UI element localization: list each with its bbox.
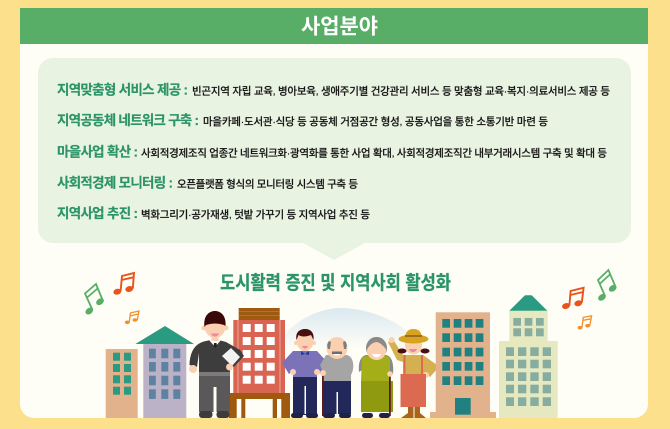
building: cream tower with teal roof xyxy=(499,295,558,418)
text: item 4 xyxy=(57,176,358,190)
icon: green music note left xyxy=(84,284,105,316)
building: tan left xyxy=(106,349,138,418)
person: bald elderly man with cane xyxy=(320,337,353,418)
building: tan right xyxy=(430,312,496,418)
icon: small orange music note right xyxy=(578,316,592,330)
text: item 3 xyxy=(57,144,607,160)
text: item 2: 마을카페·도서관·식당 등 공동체 거점공간 형성, 공동사업을 통한 소통기반 마련 등 xyxy=(203,115,548,128)
building: lavender with teal roof xyxy=(135,326,194,418)
icon: red music note right xyxy=(561,288,584,310)
heading bar: 사업분야 xyxy=(20,8,648,44)
text: item 2: 지역공동체 네트워크 구축 : xyxy=(57,113,199,128)
text: item 4: 오픈플랫폼 형식의 모니터링 시스템 구축 등 xyxy=(177,178,358,190)
panel: business areas speech bubble xyxy=(38,58,631,260)
heading bar: 사업분야: 사업분야 xyxy=(301,16,378,38)
text: item 1: 빈곤지역 자립 교육, 병아보육, 생애주기별 건강관리 서비스 등 맞춤형 교육·복지·의료서비스 제공 등 xyxy=(192,84,610,98)
text: item 3: 마을사업 확산 : xyxy=(57,144,138,160)
person: woman with straw hat and apron xyxy=(388,329,438,418)
text: item 1 xyxy=(57,82,610,98)
person: man with document xyxy=(189,311,244,418)
icon: small orange music note left xyxy=(125,311,139,324)
icon: red music note left xyxy=(113,273,134,296)
text: item 5 xyxy=(57,206,370,221)
person: elderly woman with cane xyxy=(359,337,393,418)
building: red with porch xyxy=(229,308,290,418)
subheading: 도시활력 증진 및 지역사회 활성화: 도시활력 증진 및 지역사회 활성화 xyxy=(220,272,451,294)
text: item 3: 사회적경제조직 업종간 네트워크화·광역화를 통한 사업 확대, 사회적경제조직간 내부거래시스템 구축 및 확대 등 xyxy=(141,146,607,160)
text: item 2 xyxy=(57,113,548,128)
text: item 1: 지역맞춤형 서비스 제공 : xyxy=(57,82,188,98)
text: item 4: 사회적경제 모니터링 : xyxy=(57,176,173,190)
text: item 5: 지역사업 추진 : xyxy=(57,206,138,221)
text: item 5: 벽화그리기·공가재생, 텃밭 가꾸기 등 지역사업 추진 등 xyxy=(141,208,370,221)
sky arc behind people xyxy=(283,308,408,360)
icon: green music note right xyxy=(597,270,618,302)
person: man in purple sweater xyxy=(282,329,328,418)
